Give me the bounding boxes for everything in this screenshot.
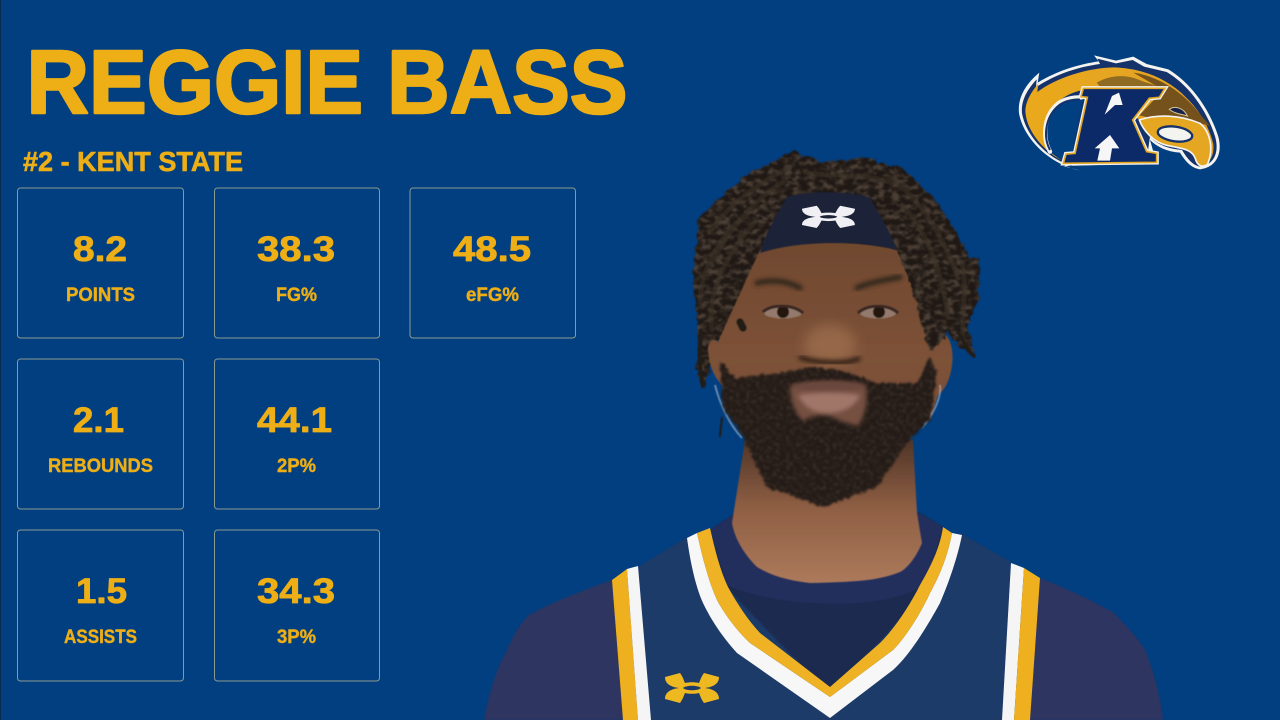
stat card: effective field goal percentage (410, 188, 576, 338)
hair (693, 151, 980, 388)
jersey left armhole gold stripe (612, 569, 638, 720)
icon part: eye (1169, 107, 1187, 116)
icon part: beak (1139, 116, 1211, 166)
icon: headband logo (802, 206, 855, 228)
left edge stripe (0, 0, 1, 720)
icon part: navy letter K (1063, 88, 1165, 163)
sleeves and shoulders (484, 578, 1163, 720)
stat card: field goal percentage: FG% (276, 285, 317, 306)
stat card: two point percentage (214, 359, 380, 509)
stat card: points: POINTS (66, 285, 135, 306)
stat card: two point percentage: 2P% (277, 456, 316, 477)
stat card: three point percentage (214, 530, 380, 681)
stat card: rebounds: 2.1 (73, 401, 124, 440)
stat card: rebounds (18, 359, 184, 509)
icon: jersey logo (665, 673, 719, 703)
eyebrows (757, 277, 900, 288)
stat card: effective field goal percentage: 48.5 (453, 230, 531, 269)
icon part: inner wing stripe (1045, 97, 1082, 152)
stat card: three point percentage: 3P% (277, 627, 316, 648)
jersey left armhole white stripe (627, 566, 651, 720)
icon part: lower arrow (1095, 135, 1119, 161)
eyes (763, 306, 898, 318)
jersey front (638, 534, 1011, 720)
icon part: upper arrow (1105, 93, 1123, 115)
undershirt collar (710, 512, 943, 604)
subtitle: jersey number and team: #2 - KENT STATE (23, 146, 243, 177)
stat card: points: 8.2 (73, 230, 127, 269)
stat card: assists (18, 530, 184, 681)
jersey right armhole gold stripe (1014, 568, 1040, 720)
icon part: brown head shading (1133, 73, 1210, 126)
stat card: assists: 1.5 (76, 572, 127, 611)
nose (799, 325, 860, 365)
icon: Kent State golden flash logo (1019, 55, 1220, 171)
jersey right armhole white stripe (1002, 563, 1024, 720)
stat card: field goal percentage (214, 188, 380, 338)
jersey collar white trim (687, 533, 962, 718)
lips (790, 382, 868, 413)
icon part: hollow behind the wing (1046, 97, 1083, 163)
neck (732, 440, 922, 583)
stat card: two point percentage: 44.1 (257, 401, 332, 440)
undershirt (700, 512, 955, 695)
hair locks (700, 167, 964, 345)
beard and mustache (720, 357, 937, 507)
chin skin patch (790, 382, 867, 426)
stat card: points (18, 188, 184, 338)
hair fringe highlights along the beard (715, 385, 940, 438)
dangling hair strands (700, 322, 974, 436)
stat card: three point percentage: 34.3 (257, 572, 335, 611)
headband (760, 192, 897, 253)
stat card: field goal percentage: 38.3 (257, 230, 335, 269)
title: REGGIE BASS (26, 33, 628, 133)
icon part: navy letter K outline (1063, 88, 1165, 163)
stat card: effective field goal percentage: eFG% (466, 285, 519, 306)
stat card: assists: ASSISTS (64, 627, 137, 648)
player photo illustration (484, 151, 1163, 720)
jersey collar gold trim (697, 527, 952, 697)
stat card: rebounds: REBOUNDS (48, 456, 153, 477)
face (708, 242, 953, 480)
right side hair lock over the temple (898, 240, 946, 352)
